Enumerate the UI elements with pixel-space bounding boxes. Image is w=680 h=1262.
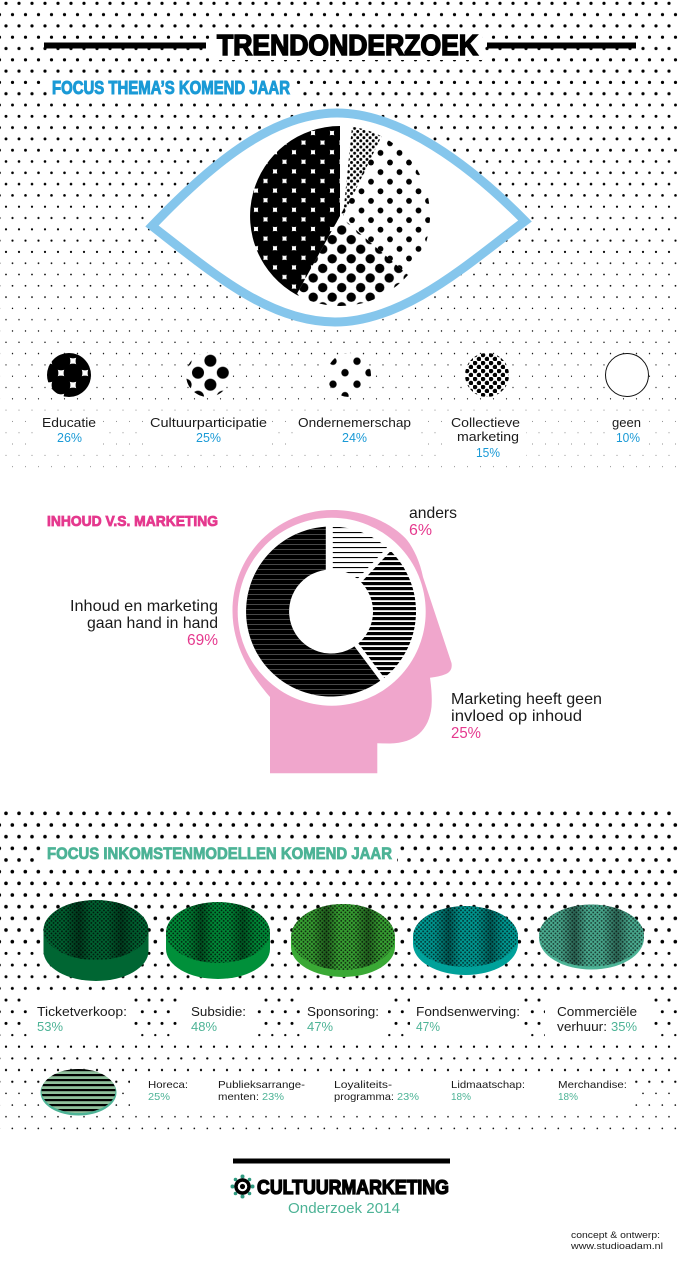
subtitle: Onderzoek 2014	[288, 1200, 400, 1217]
legend: Cultuurparticipatie	[150, 353, 267, 445]
legend: Educatie	[42, 353, 96, 445]
disc: Sponsoring	[291, 904, 395, 977]
label: anders: anders	[409, 505, 457, 522]
label: Ticketverkoop: 53%	[37, 1019, 63, 1034]
label: anders: 6%	[409, 522, 432, 539]
label: Horeca: Horeca:	[148, 1079, 188, 1091]
pie chart: focus themes	[250, 126, 430, 306]
label: Lidmaatschap: Lidmaatschap:	[451, 1079, 525, 1091]
credits: www.studioadam.nl	[570, 1241, 663, 1252]
label: marketing geen invloed	[451, 691, 602, 742]
legend: Educatie: 26%	[57, 430, 82, 445]
label: inhoud en marketing: Inhoud en marketing	[70, 598, 218, 615]
label: Loyaliteitsprogramma	[334, 1079, 419, 1103]
footer logo: CULTUURMARKETING	[257, 1177, 449, 1199]
label: Loyaliteitsprogramma: Loyaliteits-	[334, 1079, 393, 1091]
label: Publieksarrangementen: Publieksarrange-	[218, 1079, 306, 1091]
label: inhoud en marketing: 69%	[187, 632, 218, 649]
label: Fondsenwerving: 47%	[416, 1019, 440, 1034]
legend: Ondernemerschap: Ondernemerschap	[298, 415, 411, 430]
legend: geen	[606, 354, 648, 445]
disc: Ticketverkoop	[44, 900, 148, 981]
label: Merchandise: Merchandise:	[558, 1079, 627, 1091]
donut chart	[246, 520, 416, 696]
label: Horeca: 25%	[148, 1091, 170, 1103]
legend: geen: 10%	[616, 430, 640, 445]
label: Sponsoring	[307, 1004, 379, 1034]
disc: Fondsenwerving	[413, 906, 518, 975]
label: Publieksarrangementen: 23%	[262, 1091, 284, 1103]
label: Sponsoring: Sponsoring:	[307, 1004, 379, 1019]
eye with pie chart	[152, 113, 525, 322]
icon: gear	[230, 1174, 254, 1198]
label: marketing geen invloed: Marketing heeft geen	[451, 691, 602, 708]
label: inhoud en marketing: gaan hand in hand	[87, 615, 218, 632]
label: anders	[409, 505, 457, 539]
label: Commerciele verhuur	[557, 1004, 637, 1034]
label: Fondsenwerving: Fondsenwerving:	[416, 1004, 520, 1019]
label: Merchandise	[558, 1079, 627, 1103]
legend: Collectieve marketing	[451, 353, 520, 460]
legend: Collectieve marketing: 15%	[476, 445, 500, 460]
label: marketing geen invloed: 25%	[451, 725, 481, 742]
icon: head silhouette	[232, 510, 452, 773]
disc: Commerciele verhuur	[539, 904, 644, 970]
legend: Collectieve marketing: marketing	[457, 429, 519, 444]
label: Publieksarrangementen	[218, 1079, 306, 1103]
title: TRENDONDERZOEK	[217, 30, 478, 62]
label: Ticketverkoop	[37, 1004, 127, 1034]
legend: Cultuurparticipatie: 25%	[196, 430, 221, 445]
icon: eye outline	[152, 113, 525, 322]
legend: Cultuurparticipatie: Cultuurparticipatie	[150, 415, 267, 430]
credits: concept & ontwerp:	[571, 1230, 660, 1241]
label: Subsidie	[191, 1004, 246, 1034]
disc: small striped	[40, 1069, 116, 1116]
label: Commerciele verhuur: 35%	[611, 1019, 637, 1034]
label: Subsidie: Subsidie:	[191, 1004, 246, 1019]
heading: focus inkomstenmodellen: FOCUS INKOMSTENMODELLEN KOMEND JAAR	[47, 845, 392, 863]
title	[44, 30, 636, 62]
legend: geen: geen	[612, 415, 641, 430]
label: Loyaliteitsprogramma: 23%	[397, 1091, 419, 1103]
label: inhoud en marketing	[70, 598, 218, 649]
label: Lidmaatschap: 18%	[451, 1091, 471, 1103]
label: Ticketverkoop: Ticketverkoop:	[37, 1004, 127, 1019]
label: Sponsoring: 47%	[307, 1019, 333, 1034]
label: Commerciele verhuur: Commerciële	[557, 1004, 637, 1019]
legend: Ondernemerschap	[298, 353, 411, 445]
label: Lidmaatschap	[451, 1079, 525, 1103]
legend: Collectieve marketing: Collectieve	[451, 415, 520, 430]
label: Loyaliteitsprogramma: programma:	[334, 1091, 394, 1103]
label: marketing geen invloed: invloed op inhoud	[451, 708, 582, 725]
disc: Subsidie	[166, 902, 270, 979]
label: Merchandise: 18%	[558, 1091, 578, 1103]
label: Horeca	[148, 1079, 188, 1103]
footer logo	[230, 1158, 450, 1199]
heading: focus themes: FOCUS THEMA’S KOMEND JAAR	[52, 77, 290, 98]
label: Publieksarrangementen: menten:	[218, 1091, 259, 1103]
label: Fondsenwerving	[416, 1004, 520, 1034]
heading: inhoud vs marketing: INHOUD V.S. MARKETING	[47, 514, 218, 530]
label: Commerciele verhuur: verhuur:	[557, 1019, 607, 1034]
label: Subsidie: 48%	[191, 1019, 217, 1034]
credits	[570, 1230, 663, 1252]
legend: Educatie: Educatie	[42, 415, 96, 430]
legend: Ondernemerschap: 24%	[342, 430, 367, 445]
head with donut chart	[232, 510, 452, 773]
